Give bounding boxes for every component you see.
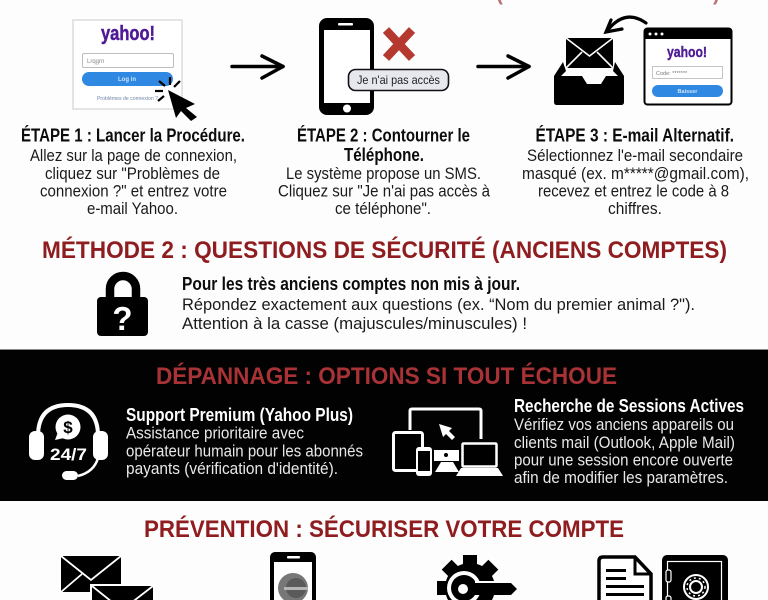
- heading: troubleshooting: DÉPANNAGE : OPTIONS SI TOUT ÉCHOUE: [156, 362, 617, 390]
- text block: step 1: connexion ?" et entrez votre: [40, 182, 227, 200]
- icon: browser window with Yahoo form: Code: *******: [656, 71, 688, 77]
- text block: method 2: [182, 274, 695, 333]
- icon: browser window with Yahoo form: Baisser: [678, 89, 698, 95]
- text block: step 2: Téléphone.: [344, 145, 424, 165]
- icon: red cross: [386, 30, 412, 58]
- panel: step 1 illustration, Yahoo login card: yahoo!: [101, 23, 155, 45]
- text block: step 2: [278, 124, 490, 218]
- text block: step 3: Sélectionnez l'e-mail secondaire: [527, 146, 743, 165]
- icon: document: [599, 557, 651, 600]
- text block: step 2: Cliquez sur "Je n'ai pas accès à: [278, 182, 490, 200]
- text block: step 1: [21, 124, 245, 218]
- text block: premium support: opérateur humain pour les abonnés: [126, 442, 363, 460]
- icon: smartphone: [319, 18, 374, 115]
- arrow: curved, window to inbox: [606, 17, 646, 32]
- icon: phone with authenticator: [270, 552, 316, 600]
- text block: active sessions: [514, 396, 744, 487]
- text block: method 2: Attention à la casse (majuscules/minuscules) !: [182, 314, 527, 333]
- text block: step 3: chiffres.: [608, 199, 662, 218]
- text block: premium support: payants (vérification d'identité).: [126, 459, 338, 478]
- text block: active sessions: Vérifiez vos anciens appareils ou: [514, 415, 734, 434]
- text block: premium support: [126, 405, 363, 478]
- heading: prevention: PRÉVENTION : SÉCURISER VOTRE COMPTE: [144, 515, 624, 543]
- icon: two envelopes: [61, 556, 154, 600]
- icon: safe: [662, 555, 728, 600]
- panel: step 1 illustration, Yahoo login card: Problèmes de connexion ?: [97, 96, 158, 102]
- panel: step 2 illustration, phone with refusal: [319, 18, 448, 115]
- panel: step 3 illustration, inbox and login window: [554, 17, 732, 105]
- icon: 24/7 support headset: [29, 405, 108, 480]
- arrow: step 1 to step 2: [232, 56, 283, 78]
- icon: 24/7 support headset: $: [63, 418, 73, 437]
- panel: troubleshooting band: [0, 349, 768, 501]
- callout: no access bubble: Je n'ai pas accès: [357, 73, 440, 87]
- text block: step 3: ÉTAPE 3 : E-mail Alternatif.: [536, 124, 734, 146]
- arrow: step 2 to step 3: [478, 56, 529, 78]
- text block: step 1: ÉTAPE 1 : Lancer la Procédure.: [21, 124, 245, 146]
- text block: premium support: Assistance prioritaire avec: [126, 424, 304, 442]
- text block: step 3: recevez et entrez le code à 8: [538, 182, 729, 200]
- text block: step 1: e-mail Yahoo.: [87, 199, 178, 218]
- text block: method 2: Pour les très anciens comptes non mis à jour.: [182, 274, 520, 294]
- icon: mouse cursor with click sparks: [155, 77, 197, 121]
- text block: active sessions: clients mail (Outlook, Apple Mail): [514, 433, 735, 452]
- text block: active sessions: afin de modifier les paramètres.: [514, 468, 728, 487]
- icon: gear with key: [437, 555, 517, 600]
- text block: step 3: masqué (ex. m*****@gmail.com),: [522, 164, 749, 183]
- heading: method 2: MÉTHODE 2 : QUESTIONS DE SÉCURITÉ (ANCIENS COMPTES): [42, 236, 727, 264]
- text block: step 3: [522, 124, 749, 218]
- icon: inbox tray with envelope: [554, 38, 624, 105]
- text block: premium support: Support Premium (Yahoo Plus): [126, 405, 353, 425]
- panel: step 1 illustration, Yahoo login card: Lrqgrn: [87, 59, 104, 65]
- text block: step 2: ÉTAPE 2 : Contourner le: [297, 124, 470, 146]
- icon: padlock with question mark: ?: [112, 300, 133, 337]
- text block: step 1: cliquez sur "Problèmes de: [45, 164, 220, 183]
- icon: 24/7 support headset: 24/7: [50, 445, 87, 464]
- text block: step 2: ce téléphone".: [335, 199, 431, 218]
- icon: browser window with Yahoo form: [644, 28, 732, 104]
- panel: step 1 illustration, Yahoo login card: [73, 20, 182, 109]
- icon: connected devices: [394, 409, 503, 476]
- text block: step 1: Allez sur la page de connexion,: [30, 146, 237, 165]
- text block: method 2: Répondez exactement aux questions (ex. “Nom du premier animal ?").: [182, 295, 695, 314]
- text block: step 2: Le système propose un SMS.: [286, 164, 481, 183]
- icon: padlock with question mark: [97, 276, 148, 337]
- icon: browser window with Yahoo form: yahoo!: [667, 44, 707, 61]
- text block: active sessions: pour une session encore ouverte: [514, 450, 733, 470]
- panel: step 1 illustration, Yahoo login card: Log in: [118, 77, 136, 83]
